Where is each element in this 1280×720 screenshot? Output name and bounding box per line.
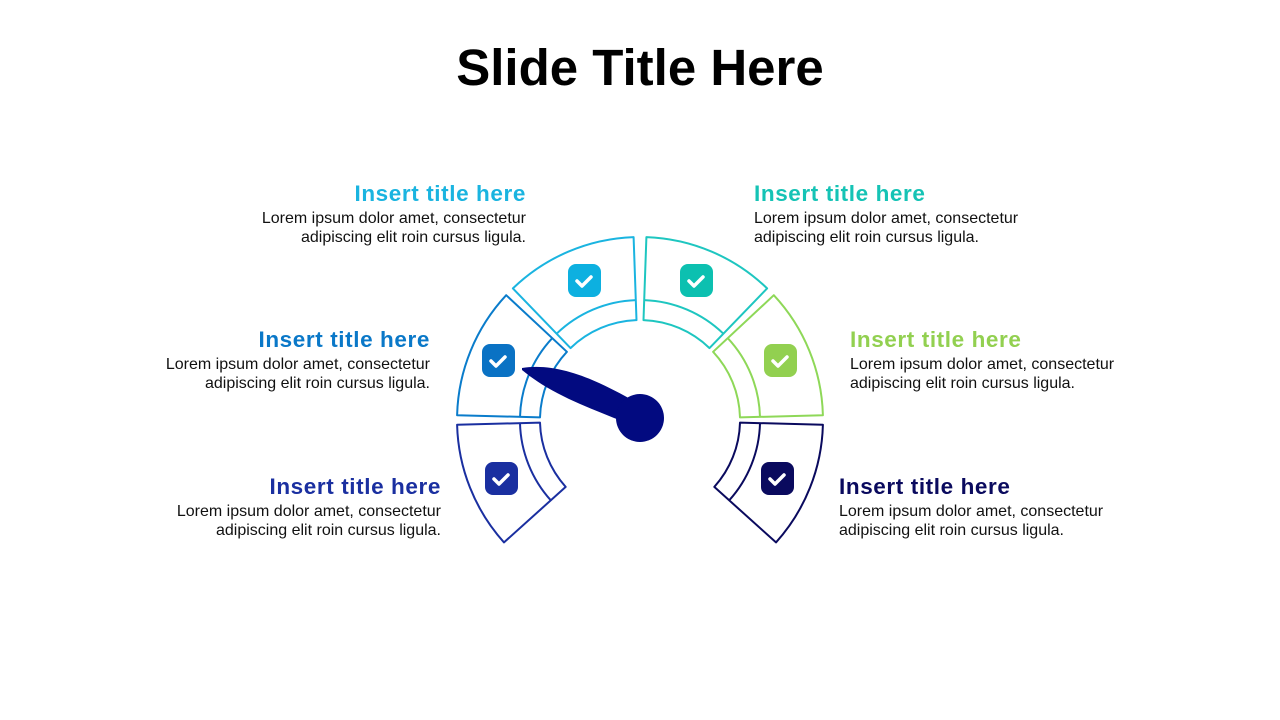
segment: middle-left — [457, 295, 567, 417]
text: top-left — [262, 181, 526, 246]
text: middle-right: Insert title here — [850, 327, 1022, 352]
title: Slide Title Here — [456, 39, 824, 96]
text: bottom-right: Lorem ipsum dolor amet, consectetur — [839, 503, 1103, 520]
text: top-right: Insert title here — [754, 181, 926, 206]
text: top-right: adipiscing elit roin cursus ligula. — [754, 229, 979, 246]
text: middle-left: Lorem ipsum dolor amet, consectetur — [166, 356, 430, 373]
text: top-right: Lorem ipsum dolor amet, consectetur — [754, 210, 1018, 227]
text: top-left: Insert title here — [354, 181, 526, 206]
text: top-left: adipiscing elit roin cursus ligula. — [301, 229, 526, 246]
text: bottom-right: Insert title here — [839, 474, 1011, 499]
text: middle-left: adipiscing elit roin cursus ligula. — [205, 375, 430, 392]
text: middle-right: Lorem ipsum dolor amet, consectetur — [850, 356, 1114, 373]
text: bottom-left: adipiscing elit roin cursus ligula. — [216, 522, 441, 539]
text: middle-left — [166, 327, 430, 392]
text: middle-right — [850, 327, 1114, 392]
text: bottom-right: adipiscing elit roin cursus ligula. — [839, 522, 1064, 539]
segment: top-left — [513, 237, 636, 348]
text: bottom-left — [177, 474, 441, 539]
text: middle-right: adipiscing elit roin cursus ligula. — [850, 375, 1075, 392]
segment: bottom-right — [714, 423, 823, 542]
needle — [522, 367, 664, 442]
text: bottom-left: Insert title here — [269, 474, 441, 499]
text: top-left: Lorem ipsum dolor amet, consectetur — [262, 210, 526, 227]
segment: top-right — [644, 237, 767, 348]
text: middle-left: Insert title here — [258, 327, 430, 352]
text: bottom-right — [839, 474, 1103, 539]
text: bottom-left: Lorem ipsum dolor amet, consectetur — [177, 503, 441, 520]
text: top-right — [754, 181, 1018, 246]
segment: bottom-left — [457, 423, 566, 542]
segment: middle-right — [713, 295, 823, 417]
